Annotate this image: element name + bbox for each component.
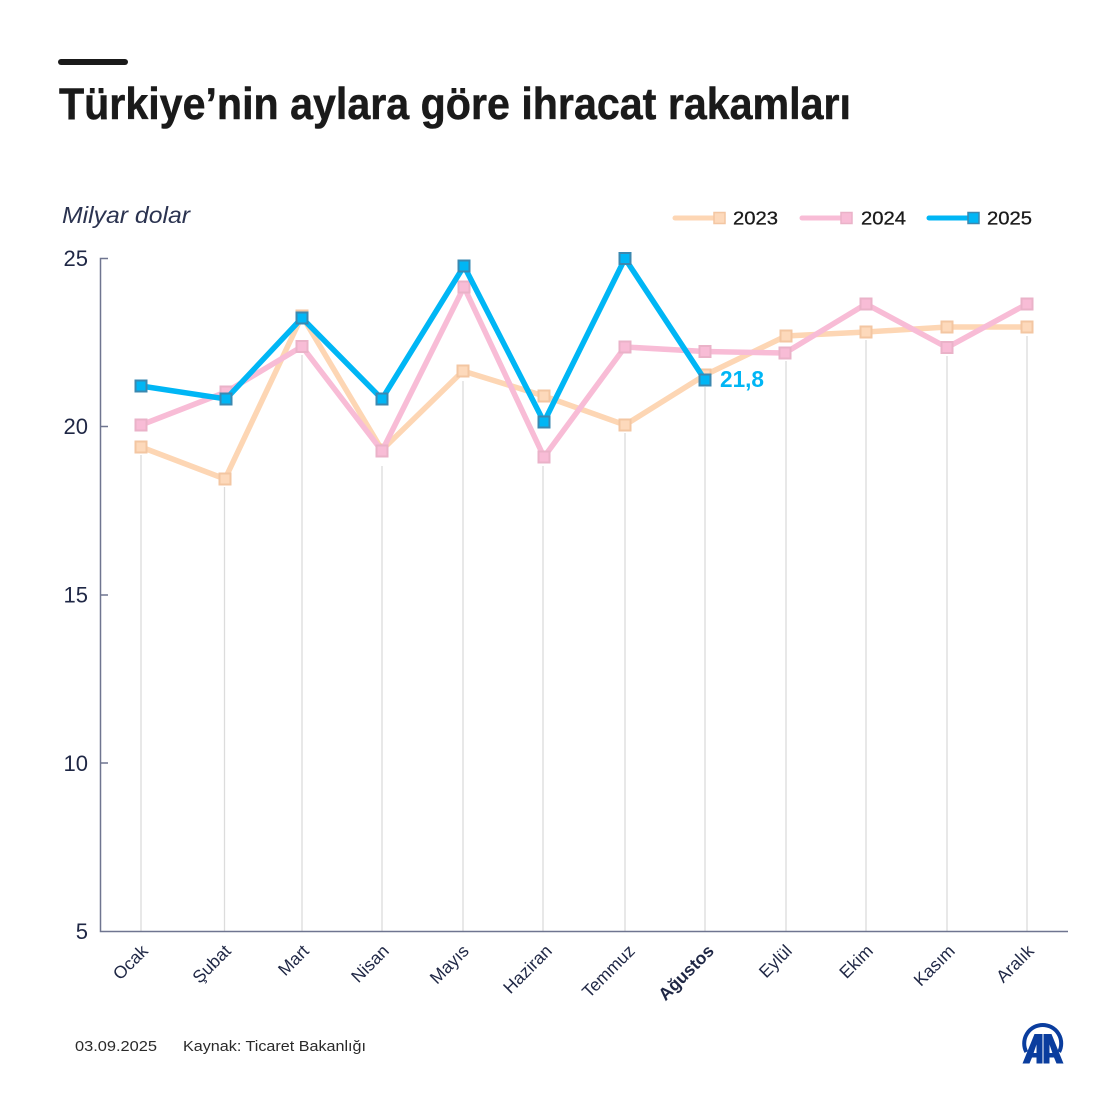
icon: AA logo: [1022, 1025, 1064, 1064]
month drop lines: [141, 336, 1027, 931]
y axis labels: 20: [64, 414, 88, 439]
legend: 2024: [802, 208, 906, 228]
legend: 2025: [929, 208, 1032, 228]
footer source: Kaynak: Ticaret Bakanlığı: [183, 1038, 366, 1055]
month labels: Ocak: [109, 941, 152, 984]
legend: 2023: 2023: [733, 208, 778, 228]
line chart: [64, 246, 1068, 1004]
legend: 2023: [675, 208, 778, 228]
y axis labels: 15: [64, 582, 88, 608]
month labels: Eylül: [755, 941, 796, 982]
month labels: Aralık: [992, 941, 1038, 986]
month labels: Haziran: [499, 941, 556, 997]
y axis labels: 5: [76, 919, 88, 944]
y axis and x axis: [100, 258, 1068, 932]
series 2025: [136, 253, 710, 428]
unit label: Milyar dolar: [62, 202, 191, 228]
month labels: Mayıs: [426, 941, 473, 988]
y axis labels: 25: [64, 246, 88, 271]
series 2023: [136, 310, 1032, 484]
legend: [675, 208, 1032, 228]
month labels: [109, 940, 1038, 1004]
month labels: Ekim: [835, 941, 877, 982]
y axis labels: 10: [64, 751, 88, 776]
y axis labels: [64, 246, 88, 944]
legend: 2024: 2024: [861, 208, 906, 228]
month labels: Şubat: [188, 941, 235, 987]
value callout: August 2025: 21,8: [720, 366, 764, 392]
month labels: Nisan: [347, 941, 393, 986]
series 2024: [136, 282, 1032, 462]
month labels: Mart: [274, 941, 313, 980]
footer date: 03.09.2025: [75, 1038, 157, 1055]
legend: 2025: 2025: [987, 208, 1032, 228]
month labels: Kasım: [910, 941, 959, 990]
title: Türkiye’nin aylara göre ihracat rakamları: [59, 80, 851, 129]
month labels: Temmuz: [578, 941, 639, 1002]
month labels: Ağustos: [654, 940, 718, 1004]
title accent bar: [58, 59, 128, 65]
